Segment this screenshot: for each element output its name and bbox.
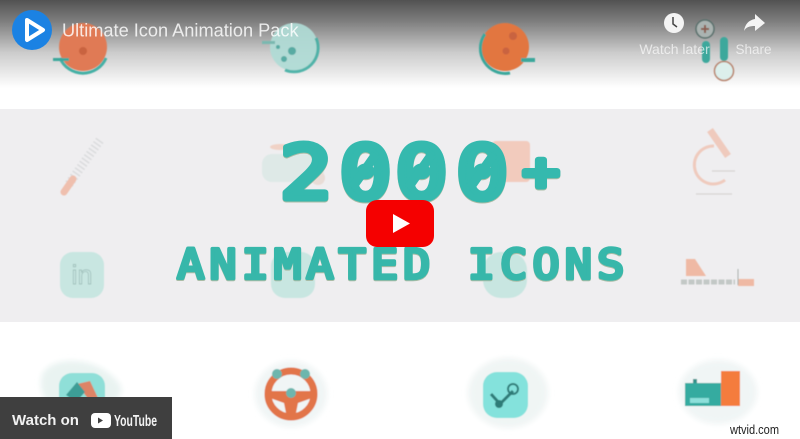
icon: faded tile right [483, 252, 527, 298]
watch later button [639, 13, 710, 57]
icon: orange planet right [480, 23, 535, 73]
video title: Ultimate Icon Animation Pack [62, 20, 299, 40]
watch on YouTube bar: Watch on [12, 412, 79, 429]
headline: 2000+: 2000 [280, 132, 509, 218]
headline: 2000+: 2000 [280, 131, 509, 217]
icon: Steam tile [468, 358, 548, 428]
watch on YouTube bar [0, 397, 172, 439]
icon: teal planet [262, 23, 318, 72]
icon: faded thermometer brush [64, 140, 100, 192]
top shade [0, 0, 800, 88]
share button [735, 14, 772, 57]
channel logo [12, 10, 52, 50]
watch on YouTube bar: YouTube [114, 413, 157, 430]
headline: 2000+: + [523, 143, 559, 203]
headline: animated icons: ANIMATED ICONS [177, 241, 629, 289]
icon: building [679, 360, 757, 424]
icon: faded calendar [492, 141, 530, 182]
icon: steering wheel [255, 361, 327, 427]
icon: faded plough vehicle [681, 259, 754, 286]
headline: animated icons: ANIMATED ICONS [177, 242, 629, 290]
icon: faded tile centre [271, 252, 315, 298]
watermark: wtvid.com [729, 422, 779, 437]
icon: magnifier and thermometer [696, 20, 734, 80]
icon: faded LinkedIn tile [60, 252, 104, 298]
icon: faded LinkedIn tile: in [71, 260, 93, 290]
watch later button: Watch later [639, 41, 710, 57]
grey centre band [0, 109, 800, 322]
YouTube play button [366, 200, 434, 247]
icon: faded microscope [694, 130, 735, 194]
headline: 2000+: + [523, 142, 559, 202]
icon: orange planet left [53, 23, 107, 73]
share button: Share [735, 42, 772, 57]
icon: faded car [262, 144, 325, 185]
icon: aperture tile [41, 361, 121, 419]
